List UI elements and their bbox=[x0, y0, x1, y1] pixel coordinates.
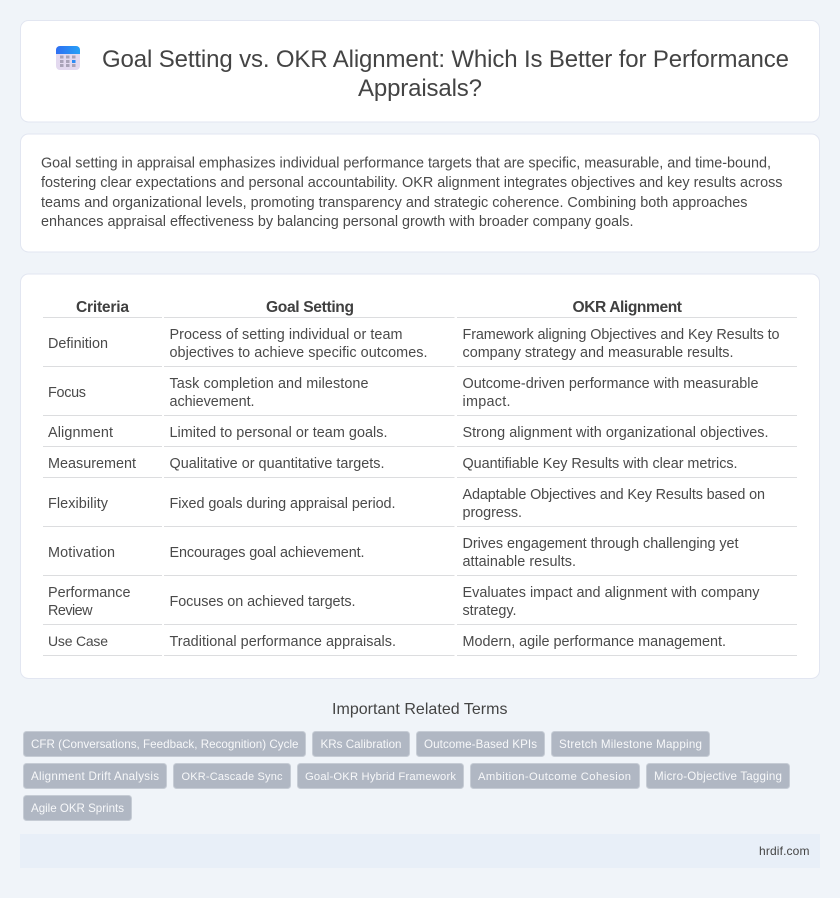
row: performance review: Focuses on achieved targets. bbox=[170, 594, 356, 610]
summary text: teams and organizational levels, promoting transparency and strategic coherence. Combining both approaches bbox=[41, 195, 748, 211]
row: motivation: Drives engagement through challenging yet bbox=[462, 536, 738, 552]
summary text bbox=[41, 156, 782, 230]
title bbox=[102, 46, 789, 102]
row: definition: Framework aligning Objectives and Key Results to bbox=[462, 327, 780, 343]
table header bbox=[76, 299, 682, 316]
row: use case: Use Case bbox=[48, 633, 108, 649]
row: definition: objectives to achieve specific outcomes. bbox=[170, 345, 428, 361]
row: focus bbox=[48, 376, 758, 410]
row: focus: Task completion and milestone bbox=[170, 376, 368, 392]
tag bbox=[312, 732, 410, 756]
row: definition: company strategy and measurable results. bbox=[462, 345, 734, 361]
tag bbox=[24, 732, 306, 756]
row: use case bbox=[48, 633, 726, 650]
title: Goal Setting vs. OKR Alignment: Which Is Better for Performance bbox=[102, 46, 789, 73]
tag: CFR (Conversations, Feedback, Recognition) Cycle bbox=[31, 738, 298, 751]
row: performance review bbox=[48, 585, 760, 619]
row: use case: Modern, agile performance management. bbox=[462, 634, 726, 650]
tag: KRs Calibration bbox=[320, 738, 402, 751]
row: measurement bbox=[48, 456, 738, 472]
row: motivation bbox=[48, 536, 738, 570]
tag: Outcome-Based KPIs bbox=[424, 738, 537, 751]
row: motivation: Motivation bbox=[48, 545, 115, 561]
panel: title bbox=[20, 20, 820, 122]
row: performance review: Performance bbox=[48, 585, 130, 601]
tag: OKR-Cascade Sync bbox=[182, 771, 283, 783]
summary text: fostering clear expectations and personal accountability. OKR alignment integrates objectives and key results across bbox=[41, 175, 782, 191]
row: performance review: strategy. bbox=[462, 603, 516, 619]
row: focus: Focus bbox=[48, 385, 86, 401]
row: performance review: Evaluates impact and alignment with company bbox=[462, 585, 760, 601]
tag bbox=[298, 764, 464, 788]
row: definition bbox=[48, 327, 780, 361]
row: alignment: Limited to personal or team goals. bbox=[170, 425, 388, 441]
heading: important related terms: Important Related Terms bbox=[332, 701, 508, 718]
icon: calendar bbox=[56, 46, 80, 70]
row: definition: Definition bbox=[48, 336, 108, 352]
table header: Criteria bbox=[76, 299, 129, 316]
title: Appraisals? bbox=[358, 75, 482, 102]
tag bbox=[24, 764, 166, 788]
tag bbox=[646, 764, 790, 788]
tag: Alignment Drift Analysis bbox=[31, 770, 159, 783]
row: flexibility bbox=[48, 487, 765, 521]
row: focus: impact. bbox=[462, 394, 510, 410]
summary text: Goal setting in appraisal emphasizes individual performance targets that are specific, measurable, and time-bound, bbox=[41, 156, 771, 172]
row: measurement: Measurement bbox=[48, 456, 136, 472]
row: flexibility: Flexibility bbox=[48, 496, 109, 512]
row: performance review: Review bbox=[48, 603, 93, 619]
row: alignment bbox=[48, 425, 768, 441]
row: flexibility: Fixed goals during appraisal period. bbox=[170, 496, 396, 512]
panel: comparison table bbox=[20, 274, 820, 678]
tag bbox=[24, 796, 132, 820]
footer bbox=[20, 834, 820, 868]
tag bbox=[470, 764, 640, 788]
row: flexibility: Adaptable Objectives and Key Results based on bbox=[462, 487, 765, 503]
row: measurement: Qualitative or quantitative targets. bbox=[170, 456, 384, 472]
tag: Stretch Milestone Mapping bbox=[559, 738, 702, 751]
footer source: hrdif.com bbox=[759, 844, 810, 858]
row: use case: Traditional performance appraisals. bbox=[170, 634, 396, 650]
summary text: enhances appraisal effectiveness by balancing personal growth with broader company goals. bbox=[41, 214, 634, 230]
tag bbox=[174, 764, 290, 788]
row: focus: achievement. bbox=[170, 394, 254, 410]
tag: Ambition-Outcome Cohesion bbox=[478, 771, 631, 783]
tag bbox=[552, 732, 710, 756]
row: motivation: attainable results. bbox=[462, 554, 576, 570]
row: flexibility: progress. bbox=[462, 505, 522, 521]
tag: Agile OKR Sprints bbox=[31, 802, 124, 815]
tag: Goal-OKR Hybrid Framework bbox=[305, 771, 456, 783]
row: motivation: Encourages goal achievement. bbox=[170, 545, 364, 561]
row: definition: Process of setting individual or team bbox=[170, 327, 402, 343]
tag bbox=[416, 732, 544, 756]
tag: Micro-Objective Tagging bbox=[654, 770, 782, 783]
row: alignment: Alignment bbox=[48, 425, 113, 441]
table header: OKR Alignment bbox=[572, 299, 682, 316]
tag list bbox=[24, 732, 790, 820]
row: measurement: Quantifiable Key Results with clear metrics. bbox=[462, 456, 738, 472]
row: alignment: Strong alignment with organizational objectives. bbox=[462, 425, 768, 441]
panel: summary bbox=[20, 134, 820, 252]
table header: Goal Setting bbox=[266, 299, 354, 316]
row: focus: Outcome-driven performance with measurable bbox=[462, 376, 758, 392]
